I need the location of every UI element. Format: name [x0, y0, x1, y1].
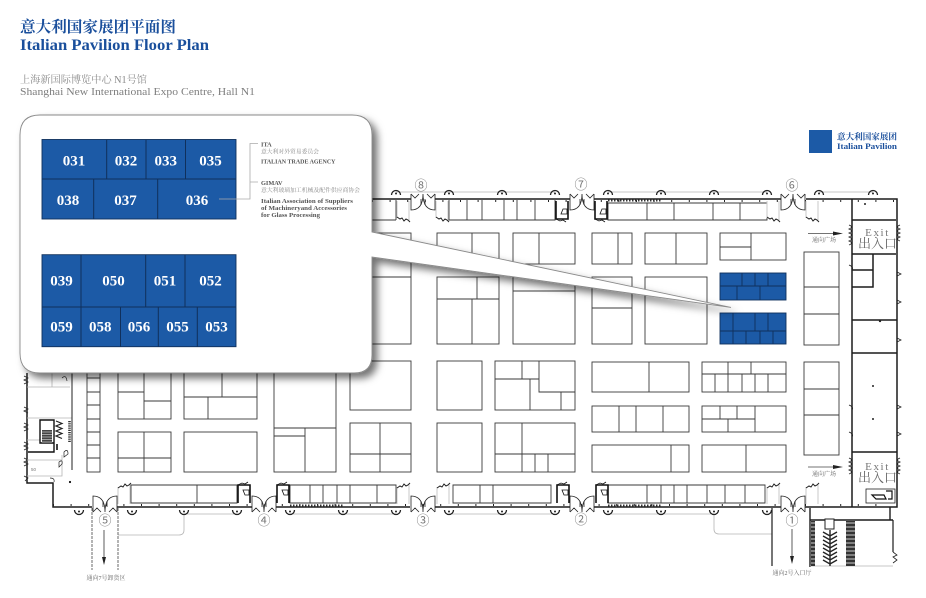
booth group: 031 to 038: 033: [154, 154, 177, 170]
exit labels: 出入口: [858, 470, 897, 485]
exit labels: [858, 227, 897, 485]
door numbers: ①: [785, 513, 799, 528]
booth group: 039 to 059: 059: [50, 320, 73, 336]
booth group: 039 to 059: 055: [166, 320, 189, 336]
organiser note: ITA: 意大利对外贸易委员会: [261, 148, 320, 156]
subtitle: venue: [20, 73, 255, 98]
corridor to hall 2 entrance: 通向2号入口厅: [772, 569, 812, 577]
title: Chinese: 意大利国家展团平面图: [20, 17, 176, 36]
door numbers: ④: [257, 513, 271, 528]
booth group: 031 to 038: 037: [114, 193, 137, 209]
subtitle: English: Shanghai New International Expo Centre, Hall N1: [20, 86, 255, 98]
organiser note: GIMAV: for Glass Processing: [261, 212, 321, 219]
top perimeter booths: [372, 200, 819, 222]
organiser note: ITA: [261, 142, 336, 166]
exhibition booths: [87, 233, 839, 472]
subtitle: Chinese: 上海新国际博览中心 N1号馆: [20, 73, 147, 86]
door numbers: ⑦: [574, 177, 588, 192]
organiser note: GIMAV: of Machineryand Accessories: [261, 205, 348, 212]
booth group: 039 to 059: 050: [102, 274, 125, 290]
booth group: 039 to 059: 051: [154, 274, 176, 290]
leader lines: [219, 144, 258, 199]
booth group: 031 to 038: 038: [57, 193, 79, 209]
organiser note: GIMAV: GIMAV: [261, 180, 283, 187]
door numbers: ③: [416, 513, 430, 528]
callout panel with pointer: [20, 115, 731, 373]
west service core: 50: [31, 467, 37, 472]
outer walls: [27, 199, 897, 507]
hydrant markers and service lines: [74, 190, 878, 535]
exit labels: Exit: [865, 227, 890, 239]
booth group: 031 to 038: 035: [199, 154, 222, 170]
corridor to hall 2 entrance: [772, 529, 812, 577]
booth group: 039 to 059: 058: [89, 320, 112, 336]
booth group: 039 to 059: 053: [205, 320, 228, 336]
corridor to hall 7 loading area: 通向7号卸货区: [86, 574, 126, 582]
plaza direction labels: 通向广场: [812, 236, 836, 244]
exit labels: Exit: [865, 461, 890, 473]
door numbers: ⑤: [98, 513, 112, 528]
plaza direction labels: [808, 232, 843, 478]
exit labels: 出入口: [858, 236, 897, 251]
title: English: Italian Pavilion Floor Plan: [20, 37, 209, 54]
door numbers: ⑥: [785, 178, 799, 193]
west service core: [24, 373, 72, 483]
corridor to hall 7 loading area: [86, 508, 126, 582]
organiser note: GIMAV: 意大利玻璃加工机械及配件供应商协会: [261, 186, 361, 194]
legend label: English: Italian Pavilion: [837, 142, 897, 151]
door numbers: ⑧: [414, 178, 428, 193]
legend: Italian Pavilion: [809, 130, 897, 153]
Italian Pavilion booths on plan: [720, 273, 786, 344]
booth group: 031 to 038: 036: [186, 193, 209, 209]
booth group: 031 to 038: 031: [63, 154, 85, 170]
south annex: [772, 507, 897, 567]
organiser note: ITA: ITA: [261, 142, 272, 148]
booth group: 039 to 059: 052: [199, 274, 222, 290]
legend label: Chinese: 意大利国家展团: [837, 130, 897, 142]
panel background: [20, 115, 731, 373]
organiser note: GIMAV: Italian Association of Suppliers: [261, 198, 354, 205]
floor plan: [24, 177, 901, 582]
booth group: 039 to 059: [42, 255, 236, 347]
booth group: 031 to 038: 032: [115, 154, 137, 170]
legend swatch: [809, 130, 832, 153]
booth group: 039 to 059: 056: [128, 320, 151, 336]
doors: [93, 194, 805, 512]
booth group: 031 to 038: [42, 140, 236, 219]
booth group: 039 to 059: 039: [50, 274, 73, 290]
organiser note: GIMAV: [261, 180, 361, 219]
organiser note: ITA: ITALIAN TRADE AGENCY: [261, 158, 336, 166]
plaza direction labels: 通向广场: [812, 470, 836, 478]
door numbers: ②: [574, 512, 588, 527]
door numbers: [98, 177, 799, 528]
title: [20, 17, 209, 54]
bottom perimeter booths: [118, 482, 819, 504]
right side rooms: [849, 199, 901, 507]
